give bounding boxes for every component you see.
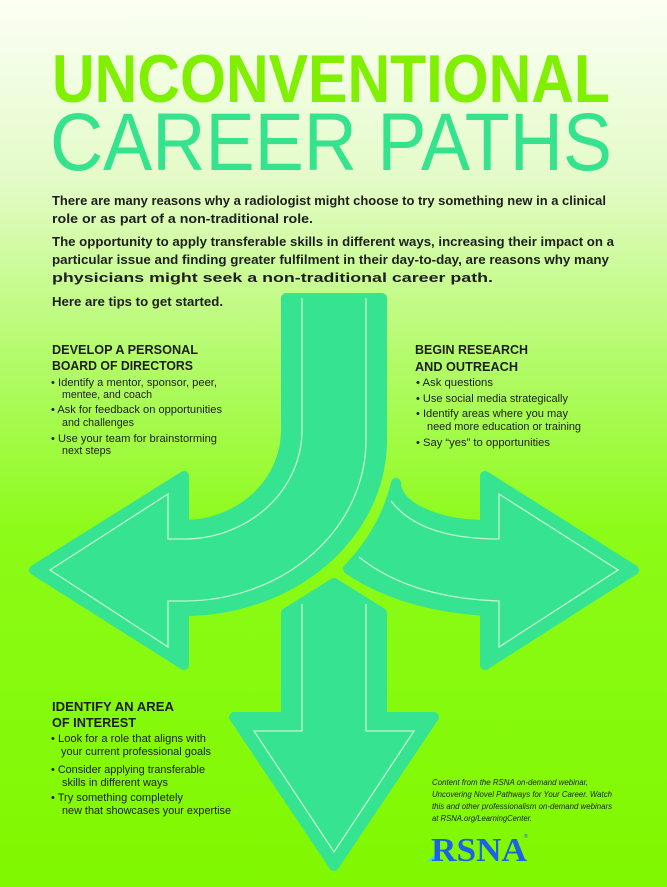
footer credit: Content from the RSNA on-demand webinar,: [432, 778, 588, 787]
arrow: right: [348, 476, 634, 665]
intro text: There are many reasons why a radiologist might choose to try something new in a clinical: [52, 194, 606, 208]
panel: research and outreach: • Say “yes” to opportunities: [416, 437, 551, 449]
arrow: down: [234, 583, 434, 866]
intro text: [52, 194, 615, 309]
panel: personal board of directors: next steps: [62, 445, 111, 457]
panel: personal board of directors: BOARD OF DIRECTORS: [52, 359, 193, 373]
title: [50, 41, 612, 188]
intro text: role or as part of a non-traditional role.: [52, 212, 313, 226]
panel: area of interest: IDENTIFY AN AREA: [52, 700, 174, 714]
panel: research and outreach: AND OUTREACH: [415, 360, 518, 374]
panel: research and outreach: • Identify areas where you may: [416, 408, 569, 420]
panel: personal board of directors: • Identify a mentor, sponsor, peer,: [51, 377, 217, 389]
panel: research and outreach: • Use social media strategically: [416, 393, 568, 405]
panel: area of interest: skills in different ways: [62, 777, 168, 789]
intro text: physicians might seek a non-traditional career path.: [52, 271, 493, 285]
logo: RSNA: ®: [524, 833, 528, 840]
panel: research and outreach: need more education or training: [427, 421, 581, 433]
arrow: left (stem curving left): [34, 298, 382, 665]
panel: personal board of directors: DEVELOP A PERSONAL: [52, 343, 198, 357]
footer credit: at RSNA.org/LearningCenter.: [432, 814, 532, 823]
panel: area of interest: • Consider applying transferable: [51, 764, 205, 776]
panel: research and outreach: BEGIN RESEARCH: [415, 343, 528, 357]
panel: area of interest: OF INTEREST: [52, 716, 136, 730]
panel: personal board of directors: • Use your team for brainstorming: [51, 433, 217, 445]
panel: personal board of directors: • Ask for feedback on opportunities: [51, 404, 222, 416]
panel: area of interest: [51, 700, 231, 817]
panel: research and outreach: • Ask questions: [416, 377, 493, 389]
panel: personal board of directors: mentee, and coach: [62, 389, 152, 401]
panel: personal board of directors: [51, 343, 222, 457]
footer credit: Uncovering Novel Pathways for Your Career. Watch: [432, 790, 613, 799]
panel: personal board of directors: and challenges: [62, 417, 134, 429]
logo: RSNA: RSNA: [431, 832, 527, 869]
title: CAREER PATHS: [50, 97, 612, 188]
footer credit: this and other professionalism on-demand webinars: [432, 802, 612, 811]
intro text: The opportunity to apply transferable skills in different ways, increasing their impact on a: [52, 235, 615, 249]
intro text: Here are tips to get started.: [52, 295, 223, 309]
footer credit: [432, 778, 613, 823]
panel: area of interest: • Try something completely: [51, 792, 184, 804]
intro text: particular issue and finding greater fulfilment in their day-to-day, are reasons why many: [52, 253, 609, 267]
panel: area of interest: • Look for a role that aligns with: [51, 733, 206, 745]
panel: area of interest: new that showcases your expertise: [62, 805, 231, 817]
panel: area of interest: your current professional goals: [61, 746, 211, 758]
panel: research and outreach: [415, 343, 581, 449]
